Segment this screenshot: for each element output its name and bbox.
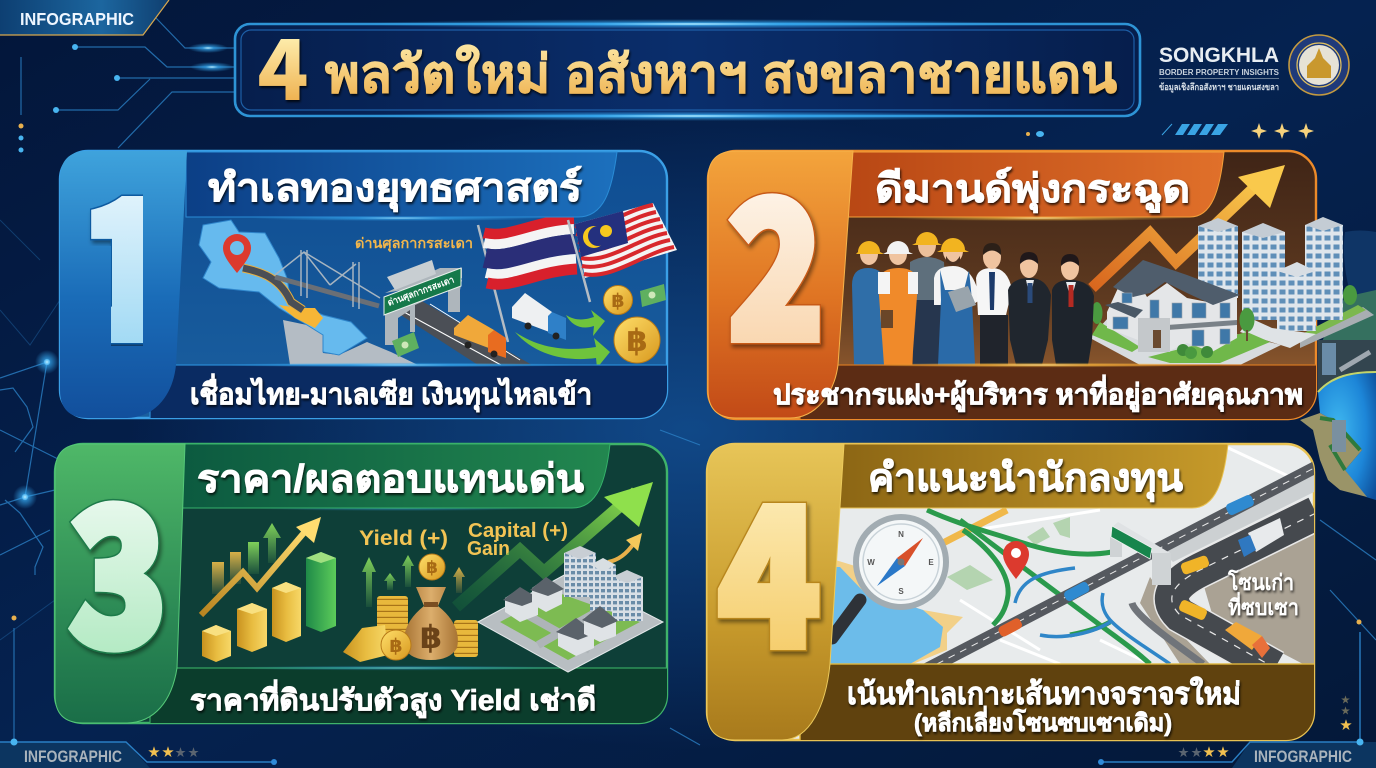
footer right: ★★ — [1178, 747, 1202, 759]
label: yield: Yield (+) — [359, 527, 448, 550]
worker orange — [878, 241, 918, 365]
numeral 2: 2 — [728, 119, 824, 394]
numeral 3: 3 — [69, 425, 167, 700]
worker in grey — [910, 232, 946, 365]
label: capital gain: Gain — [467, 538, 510, 560]
logo block: ข้อมูลเชิงลึกอสังหาฯ ชายแดนสงขลา — [1159, 82, 1279, 93]
numeral 1: 1 — [80, 118, 172, 394]
glow highlights 1 — [220, 215, 580, 368]
label: old zone: ที่ซบเซา — [1228, 591, 1299, 620]
tab 3 — [55, 444, 185, 723]
illustration: map, bridge and trade route — [199, 220, 666, 368]
numeral 2: 2 — [728, 119, 824, 394]
top-left INFOGRAPHIC tag — [0, 0, 169, 35]
bottom bar 3 — [150, 668, 670, 724]
icon: magnifying compass: W — [867, 558, 875, 567]
footer right: ★ — [1341, 706, 1350, 716]
label: old zone — [1227, 569, 1299, 620]
panel 2: demand surge — [706, 150, 1374, 420]
panel 1: strategic location — [58, 150, 677, 420]
numeral 4: 4 — [718, 425, 820, 701]
icon: white truck — [512, 293, 566, 340]
icon: magnifying compass: S — [898, 587, 904, 596]
footer right: ★ — [1340, 718, 1352, 732]
bottom bar 1 — [150, 365, 670, 420]
caption 3: ราคาที่ดินปรับตัวสูง Yield เช่าดี — [190, 679, 596, 718]
title banner — [235, 4, 1140, 125]
caption 4 — [847, 676, 1241, 737]
illustration: money bag, gold and coins: ฿ — [389, 636, 403, 657]
caption 2: ประชากรแฝง+ผู้บริหาร หาที่อยู่อาศัยคุณภาพ — [773, 374, 1303, 412]
footer left: ★★ — [175, 747, 199, 759]
icon: green arrows — [566, 310, 605, 336]
coastline map at right edge — [1300, 230, 1376, 500]
footer left: ★★ — [148, 745, 174, 759]
illustration: rising arrow — [456, 482, 653, 607]
caption 4: เน้นทำเลเกาะเส้นทางจราจรใหม่ — [847, 676, 1241, 711]
engineer with overalls — [934, 238, 980, 365]
icon: magnifying compass: N — [898, 530, 904, 539]
numeral 4: 4 — [718, 425, 820, 701]
tab 2 — [708, 151, 853, 418]
caption 1: เชื่อมไทย-มาเลเซีย เงินทุนไหลเข้า — [190, 373, 592, 412]
header 4 — [838, 444, 1228, 508]
label: capital gain — [467, 520, 568, 560]
logo block: SONGKHLA — [1159, 44, 1279, 67]
footer right: ★★ — [1203, 745, 1229, 759]
title text: พลวัตใหม่ อสังหาฯ สงขลาชายแดน — [325, 44, 1117, 104]
header 1 — [186, 152, 617, 217]
stars top right — [1251, 123, 1314, 139]
icon: map pin — [1003, 541, 1029, 579]
icon: magnifying compass — [832, 517, 946, 638]
numeral 3: 3 — [69, 425, 167, 700]
illustration: house on lawn — [1090, 260, 1281, 365]
icon: seal — [1289, 35, 1349, 95]
executive white shirt — [976, 243, 1012, 365]
illustration: gantry — [1110, 522, 1171, 585]
label: old zone: โซนเก่า — [1227, 569, 1294, 595]
bottom bar 2 — [800, 365, 1320, 421]
Malaysia flag — [568, 203, 677, 302]
illustration: road map — [829, 445, 1318, 668]
title text — [257, 4, 1117, 125]
numeral 1: 1 — [80, 118, 172, 394]
icon: baht coins: ฿ — [626, 323, 648, 358]
footer left — [0, 738, 277, 768]
panel 3: price and returns — [55, 425, 670, 724]
logo block: BORDER PROPERTY INSIGHTS — [1159, 67, 1279, 77]
icon: orange truck — [454, 315, 506, 358]
Thai flag — [478, 219, 577, 342]
caption 4: (หลีกเลี่ยงโซนซบเซาเดิม) — [914, 705, 1172, 737]
executive dark suit — [1008, 252, 1051, 365]
illustration: money bag, gold and coins: ฿ — [426, 558, 438, 577]
footer left: INFOGRAPHIC — [24, 747, 122, 766]
heading 3: ราคา/ผลตอบแทนเด่น — [197, 458, 584, 501]
illustration: money bag, gold and coins: ฿ — [420, 619, 442, 655]
tab 4 — [707, 444, 844, 740]
bar chart — [201, 517, 336, 662]
top-left INFOGRAPHIC tag: INFOGRAPHIC — [20, 9, 134, 29]
panel 4: investor advice — [707, 425, 1320, 742]
icons: vehicles — [997, 494, 1284, 658]
chart arrow — [1092, 165, 1285, 288]
icon: baht coins: ฿ — [611, 291, 625, 312]
label: capital gain: Capital (+) — [468, 520, 568, 542]
tab 1 — [60, 151, 187, 418]
illustration: money bag, gold and coins — [343, 554, 478, 662]
executive red tie — [1052, 254, 1094, 365]
footer right: INFOGRAPHIC — [1254, 747, 1352, 766]
bottom bar 4 — [800, 664, 1320, 742]
logo block — [1159, 35, 1349, 95]
numeral 1 — [89, 194, 143, 346]
header 2 — [846, 152, 1224, 217]
title text: 4 — [257, 4, 309, 125]
footer right: ★ — [1341, 695, 1350, 705]
label: customs checkpoint: ด่านศุลกากรสะเดา — [355, 235, 473, 252]
header 3 — [180, 444, 610, 508]
heading 2: ดีมานด์พุ่งกระฉูด — [875, 166, 1190, 213]
illustration: workers and executives — [852, 232, 1094, 365]
heading 1: ทำเลทองยุทธศาสตร์ — [208, 165, 582, 212]
icon: baht coins — [392, 284, 666, 363]
heading 4: คำแนะนำนักลงทุน — [868, 457, 1183, 502]
icon: location pin — [223, 234, 251, 273]
illustration: isometric neighbourhood — [478, 546, 663, 672]
highway sign: ด่านศุลกากรสะเดา — [386, 275, 456, 309]
worker blue — [852, 241, 886, 365]
footer right — [1098, 620, 1376, 768]
illustration: towers — [1198, 217, 1374, 348]
icon: magnifying compass: E — [928, 558, 934, 567]
glow highlights 2 — [860, 215, 1220, 368]
glow highlights 3 — [220, 505, 580, 670]
